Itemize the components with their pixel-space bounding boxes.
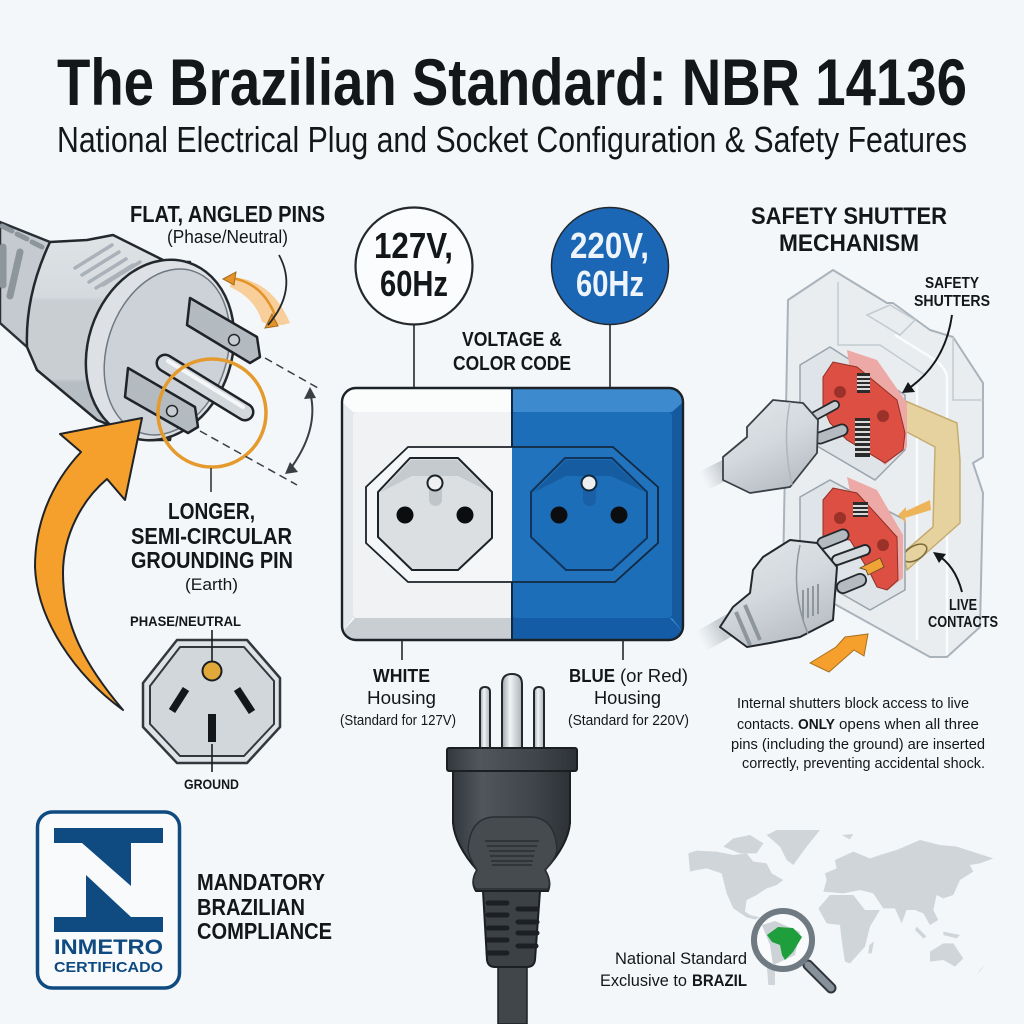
label: longer grounding pin: SEMI-CIRCULAR xyxy=(131,523,292,549)
top pink shutter rim xyxy=(847,350,907,465)
icon: Brazil xyxy=(767,927,802,960)
label: safety shutters: SHUTTERS xyxy=(914,293,990,310)
label: white housing xyxy=(340,666,456,729)
label: exclusive to Brazil: National Standard xyxy=(615,949,747,968)
badge: INMETRO certification: CERTIFICADO xyxy=(54,959,163,976)
badge: 127V 60Hz: 60Hz xyxy=(380,263,448,304)
label: ground: GROUND xyxy=(184,776,239,792)
icon: pin screws xyxy=(166,334,240,416)
plug flange xyxy=(447,748,577,771)
arrow: pin angle wedge xyxy=(223,272,290,328)
label: longer grounding pin xyxy=(131,498,293,594)
label: white housing: WHITE xyxy=(373,666,430,686)
heading: safety shutter mechanism: SAFETY SHUTTER xyxy=(751,203,947,230)
text block: shutter explanation xyxy=(731,695,985,772)
arrow: big orange curved arrow xyxy=(35,418,142,710)
icon: black plug xyxy=(447,674,577,1024)
plug cable xyxy=(498,965,527,1024)
label: flat angled pins xyxy=(130,201,325,247)
label: mandatory compliance xyxy=(197,869,332,944)
icon: top flat pin xyxy=(187,298,260,363)
panel: pin face diagram xyxy=(130,613,280,792)
icon: octagon pin face xyxy=(143,630,280,772)
label: safety shutters xyxy=(914,275,990,310)
label: longer grounding pin: GROUNDING PIN xyxy=(131,547,293,573)
label: exclusive to Brazil: Exclusive to xyxy=(600,971,687,990)
label: voltage and color code: COLOR CODE xyxy=(453,353,571,375)
label: flat angled pins: FLAT, ANGLED PINS xyxy=(130,201,325,227)
icon: cable of side plug xyxy=(0,222,60,347)
bottom socket recess xyxy=(800,480,905,610)
bottom plug xyxy=(700,535,865,647)
faceplate right xyxy=(512,447,658,582)
top plug xyxy=(703,400,842,493)
arrow: callout to angled pins xyxy=(268,255,286,325)
housing back details xyxy=(838,282,983,400)
label: exclusive to Brazil xyxy=(600,949,747,990)
arrow: safety shutters callout xyxy=(902,315,952,393)
label: live contacts: CONTACTS xyxy=(928,614,998,631)
arrow: small shutter movement xyxy=(898,500,931,523)
panel: flat angled pins plug xyxy=(0,201,325,492)
text block: shutter explanation: correctly, preventing accidental shock. xyxy=(742,755,985,772)
gold contact bracket xyxy=(903,400,960,570)
text block: shutter explanation: contacts. xyxy=(737,716,794,733)
text block: shutter explanation: opens when all three xyxy=(839,716,979,733)
label: mandatory compliance: COMPLIANCE xyxy=(197,918,332,944)
transparent housing xyxy=(783,270,983,657)
label: live contacts xyxy=(928,597,998,631)
label: blue housing: (or Red) xyxy=(620,666,688,686)
badge: 220V 60Hz: 60Hz xyxy=(576,263,644,304)
plug body inset xyxy=(468,817,557,889)
leader lines below socket xyxy=(402,640,623,660)
bottom pink shutter rim xyxy=(847,477,903,590)
label: longer grounding pin: (Earth) xyxy=(185,575,238,594)
label: voltage and color code: VOLTAGE & xyxy=(462,329,562,351)
icon: highlight ring xyxy=(158,359,266,467)
socket: blue 220V xyxy=(531,458,647,570)
housing faces xyxy=(342,402,683,640)
icon: grip lines xyxy=(75,245,140,288)
label: blue housing: (Standard for 220V) xyxy=(568,712,689,729)
label: blue housing: BLUE xyxy=(569,666,615,686)
icon: plug face xyxy=(84,253,250,451)
label: safety shutters: SAFETY xyxy=(925,275,979,292)
top socket recess xyxy=(800,347,905,480)
plug grip xyxy=(483,891,540,967)
label: blue housing: Housing xyxy=(594,688,661,708)
text block: shutter explanation: pins (including the ground) are inserted xyxy=(731,736,985,753)
text block: shutter explanation: ONLY xyxy=(798,716,835,733)
label: phase neutral: PHASE/NEUTRAL xyxy=(130,613,241,629)
dashed guides xyxy=(200,358,318,485)
socket: white 127V xyxy=(378,458,492,570)
arrow: orange pin marker xyxy=(860,558,884,575)
badge: INMETRO certification xyxy=(38,812,180,988)
badge: 127V 60Hz: 127V, xyxy=(374,225,453,266)
label: live contacts: LIVE xyxy=(949,597,977,614)
label: white housing: Housing xyxy=(367,688,436,708)
icon: magnifier handle xyxy=(808,965,831,988)
blue housing xyxy=(512,388,683,640)
housing outline xyxy=(342,388,683,640)
label: blue housing xyxy=(568,666,689,729)
label: mandatory compliance: BRAZILIAN xyxy=(197,894,305,920)
badge: 127V 60Hz xyxy=(356,208,472,388)
housing inner panels xyxy=(895,335,947,655)
label: white housing: (Standard for 127V) xyxy=(340,712,456,729)
label: mandatory compliance: MANDATORY xyxy=(197,869,325,895)
heading: safety shutter mechanism xyxy=(751,203,947,257)
plug body grooves xyxy=(485,841,539,865)
arrow: insertion direction xyxy=(810,634,868,672)
bottom red shutter xyxy=(823,488,898,590)
plug body xyxy=(453,771,570,891)
grip grooves xyxy=(488,903,537,953)
label: exclusive to Brazil: BRAZIL xyxy=(692,971,747,990)
world map xyxy=(688,830,993,985)
panel: dual socket xyxy=(342,388,683,660)
icon: bottom flat pin xyxy=(125,368,198,433)
heading: safety shutter mechanism: MECHANISM xyxy=(779,230,919,257)
plug pins xyxy=(480,674,544,750)
icon: South America in lens xyxy=(762,921,800,965)
white housing xyxy=(342,388,512,640)
arrow: live contacts callout xyxy=(933,552,962,592)
label: longer grounding pin: LONGER, xyxy=(168,498,255,524)
icon: plug collar xyxy=(63,240,257,460)
arrow: pin length span xyxy=(285,387,316,474)
top red shutter xyxy=(823,362,905,463)
icon: INMETRO logo mark xyxy=(54,828,163,932)
label: voltage and color code xyxy=(453,329,571,375)
panel: shutter mechanism illustration xyxy=(700,270,998,672)
live contact xyxy=(900,540,930,566)
panel: world map with magnifier xyxy=(600,830,993,990)
faceplate left xyxy=(366,447,512,582)
label: flat angled pins: (Phase/Neutral) xyxy=(167,227,288,247)
leader line to grounding pin label xyxy=(210,468,212,492)
badge: 220V 60Hz xyxy=(552,208,668,388)
icon: round grounding pin xyxy=(165,361,245,412)
badge: INMETRO certification: INMETRO xyxy=(54,936,163,959)
text block: shutter explanation: Internal shutters block access to live xyxy=(737,695,969,712)
badge: 220V 60Hz: 220V, xyxy=(570,225,649,266)
icon: plug body xyxy=(27,235,190,440)
icon: magnifier lens xyxy=(754,911,812,969)
